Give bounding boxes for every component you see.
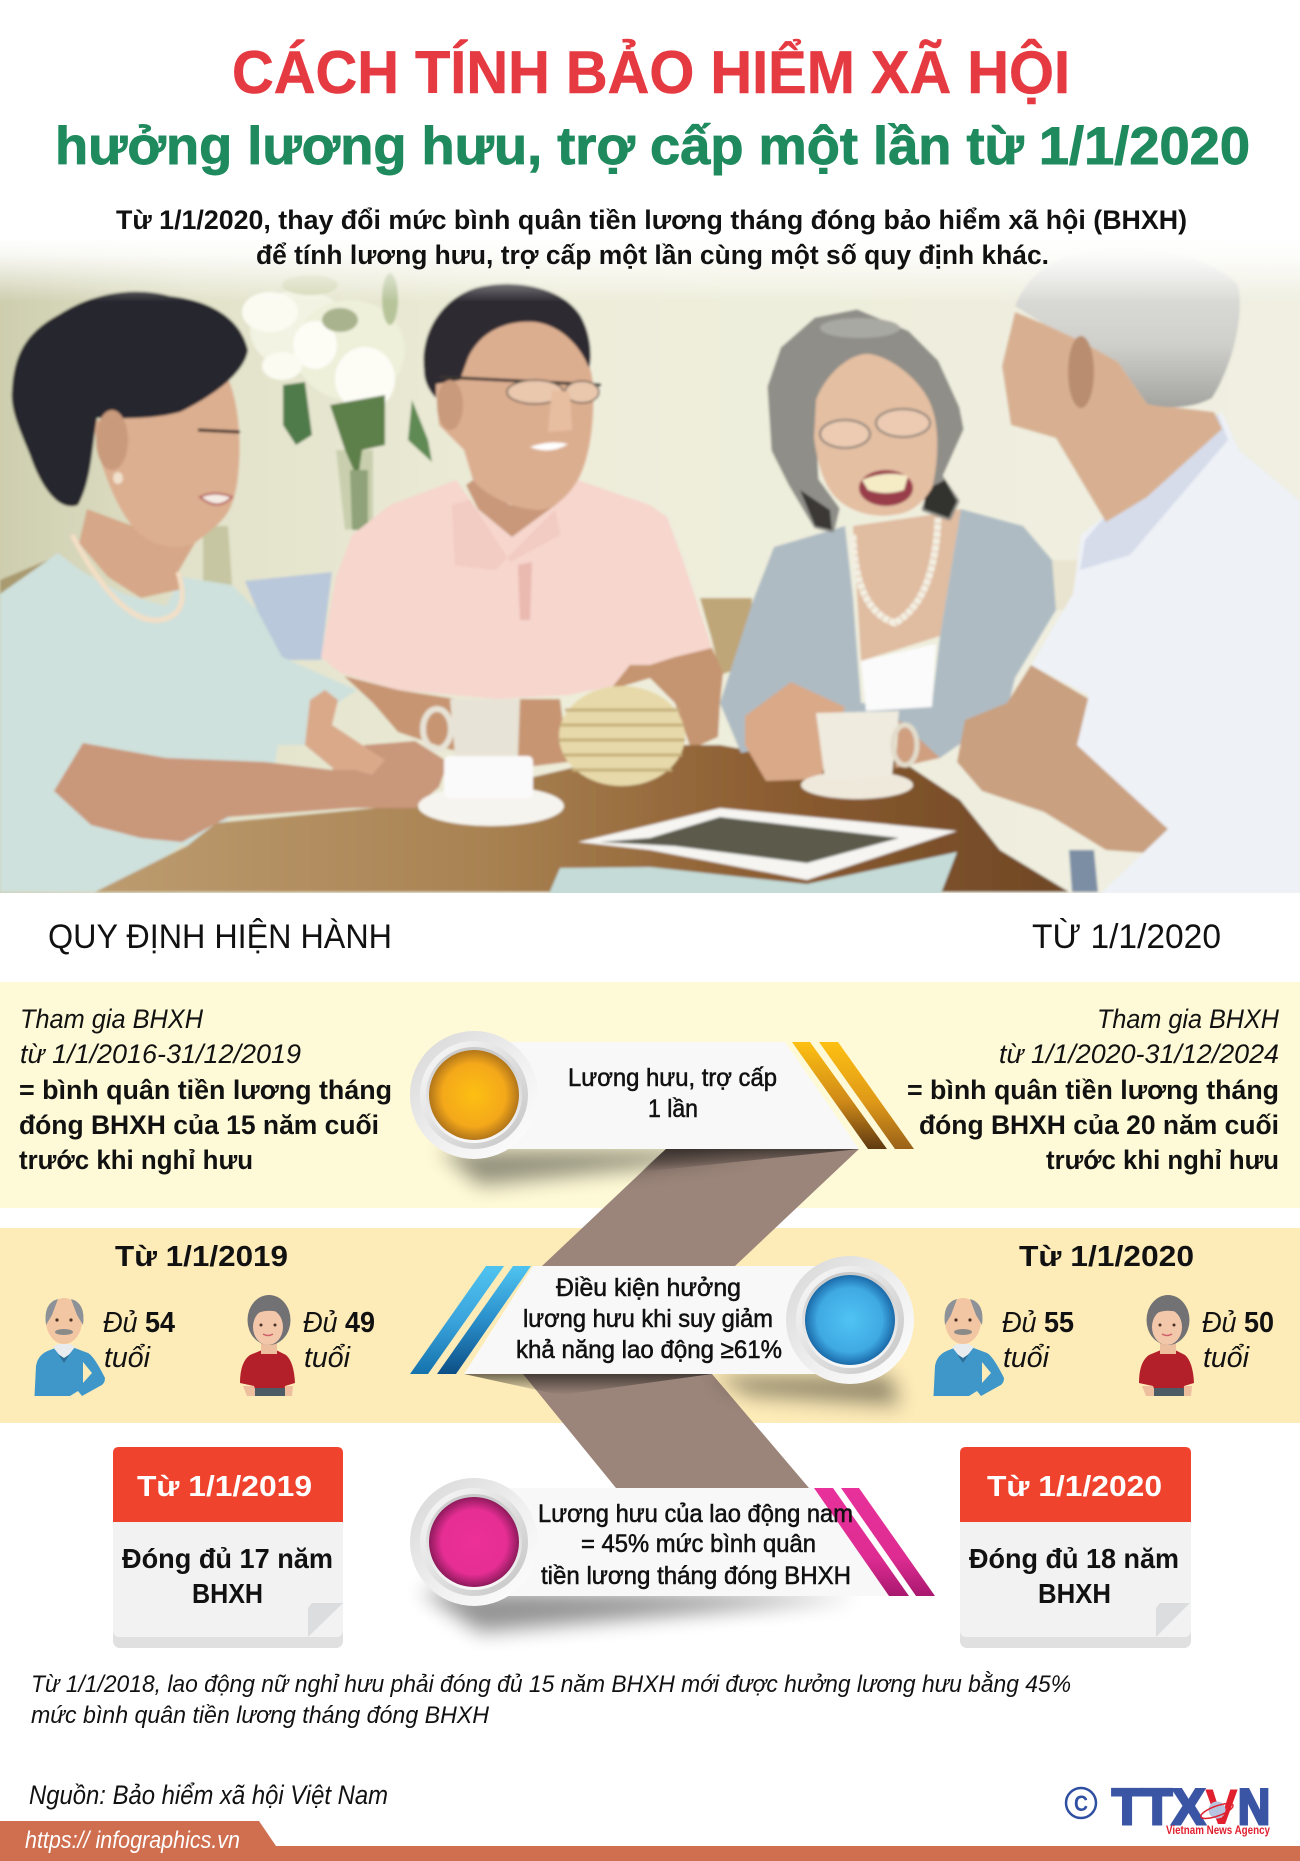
- dial: pink: [410, 1478, 538, 1606]
- ribbon label 3: tiền lương tháng đóng BHXH: [541, 1562, 851, 1590]
- right heading: from 2020: Từ 1/1/2020: [1019, 1241, 1194, 1273]
- card body text: [969, 1543, 1179, 1609]
- cup and saucer: [418, 786, 564, 826]
- title: CÁCH TÍNH BẢO HIỂM XÃ HỘI: [232, 39, 1070, 106]
- intro text: [116, 205, 1187, 270]
- flowers: [336, 450, 373, 530]
- icon: old man right: [934, 1298, 1004, 1396]
- footnote: mức bình quân tiền lương tháng đóng BHXH: [31, 1702, 490, 1729]
- source: Nguồn: Bảo hiểm xã hội Việt Nam: [29, 1780, 388, 1810]
- connector: lower: [464, 1374, 809, 1488]
- icon: old woman left: [240, 1295, 295, 1396]
- card heading: Từ 1/1/2019: [137, 1471, 312, 1503]
- woman 1 face and hair: [93, 379, 240, 547]
- footnote: Từ 1/1/2018, lao động nữ nghỉ hưu phải đóng đủ 15 năm BHXH mới được hưởng lương hưu bằng 45%: [31, 1671, 1071, 1698]
- ribbon label 1: 1 lần: [648, 1095, 698, 1123]
- stripes: pink: [814, 1488, 935, 1596]
- ribbon label 3: = 45% mức bình quân: [581, 1530, 816, 1558]
- man 1 shirt: [321, 478, 712, 699]
- table: [95, 745, 1069, 892]
- icon: old woman right: [1139, 1295, 1194, 1396]
- left text block: current average salary rule: từ 1/1/2016-31/12/2019: [20, 1039, 301, 1069]
- left text block: current average salary rule: Tham gia BHXH: [20, 1004, 203, 1034]
- copyright mark: [1066, 1788, 1096, 1818]
- left text block: current average salary rule: đóng BHXH của 15 năm cuối: [19, 1110, 379, 1140]
- ribbon 2: eligibility: [410, 1256, 914, 1405]
- icon: old man left: [34, 1298, 105, 1396]
- woman 1 body: [0, 553, 357, 892]
- footnote: [31, 1671, 1071, 1729]
- card: 2019 contribution: [113, 1447, 343, 1648]
- card body text: BHXH: [192, 1578, 263, 1609]
- woman 1 arm: [54, 741, 448, 842]
- man 1 face and hair: [435, 312, 593, 510]
- label: man 54: tuổi: [104, 1342, 152, 1374]
- column heading: from 2020: TỪ 1/1/2020: [1032, 918, 1221, 956]
- footer bar with URL: https:// infographics.vn: [25, 1827, 240, 1854]
- ribbon label 3: Lương hưu của lao động nam: [538, 1500, 853, 1528]
- right text block: 2020 average salary rule: Tham gia BHXH: [1097, 1004, 1279, 1034]
- dial: orange: [410, 1031, 538, 1159]
- left text block: current average salary rule: trước khi nghỉ hưu: [19, 1145, 253, 1175]
- label: woman 50: Đủ 50: [1202, 1307, 1274, 1339]
- label: woman 49: tuổi: [304, 1342, 352, 1374]
- photo: four seniors at a table: [0, 236, 1300, 903]
- logo: TTXVN: N: [1238, 1779, 1270, 1835]
- copyright mark: C: [1074, 1791, 1088, 1816]
- ribbon label 2: [516, 1274, 782, 1364]
- ribbon label 2: lương hưu khi suy giảm: [523, 1305, 773, 1333]
- label: man 55: tuổi: [1003, 1342, 1051, 1374]
- logo: TTXVN: [1066, 1779, 1271, 1837]
- woman 2: [853, 509, 961, 661]
- column heading: current rule: QUY ĐỊNH HIỆN HÀNH: [48, 918, 392, 956]
- left text block: current average salary rule: [19, 1004, 392, 1175]
- intro text: Từ 1/1/2020, thay đổi mức bình quân tiền lương tháng đóng bảo hiểm xã hội (BHXH): [116, 205, 1187, 235]
- intro text: để tính lương hưu, trợ cấp một lần cùng một số quy định khác.: [256, 240, 1049, 270]
- man 1 arms: [344, 676, 568, 766]
- right text block: 2020 average salary rule: trước khi nghỉ hưu: [1046, 1145, 1279, 1175]
- connector: upper: [542, 1149, 859, 1266]
- ribbon 1: pension: [410, 1031, 914, 1185]
- ribbon label 1: Lương hưu, trợ cấp: [568, 1064, 777, 1092]
- right text block: 2020 average salary rule: = bình quân tiền lương tháng: [907, 1075, 1279, 1105]
- right text block: 2020 average salary rule: từ 1/1/2020-31/12/2024: [999, 1039, 1279, 1069]
- card body text: Đóng đủ 17 năm: [122, 1543, 333, 1574]
- card: 2020 contribution: [960, 1447, 1191, 1648]
- label: woman 49: [303, 1307, 375, 1374]
- label: man 55: Đủ 55: [1002, 1307, 1074, 1339]
- band: pension and lump sum: [0, 982, 1300, 1208]
- label: man 54: Đủ 54: [103, 1307, 175, 1339]
- left heading: from 2019: Từ 1/1/2019: [115, 1241, 288, 1273]
- label: man 54: [103, 1307, 175, 1374]
- band: reduced capacity: [0, 1228, 1300, 1423]
- right text block: 2020 average salary rule: đóng BHXH của 20 năm cuối: [919, 1110, 1279, 1140]
- stripes: blue: [410, 1266, 531, 1374]
- tablet: [578, 808, 957, 880]
- logo: TTXVN: TTX: [1112, 1779, 1205, 1835]
- ribbon label 2: Điều kiện hưởng: [556, 1274, 741, 1302]
- ribbon 3: male pension: [410, 1478, 935, 1632]
- man 2: [957, 665, 1168, 854]
- label: woman 49: Đủ 49: [303, 1307, 375, 1339]
- card body text: [122, 1543, 333, 1609]
- logo: TTXVN: Vietnam News Agency: [1166, 1825, 1271, 1837]
- basket: [559, 686, 685, 786]
- card heading: Từ 1/1/2020: [987, 1471, 1162, 1503]
- footer bar with URL: [0, 1821, 1300, 1861]
- card body text: Đóng đủ 18 năm: [969, 1543, 1179, 1574]
- subtitle: hưởng lương hưu, trợ cấp một lần từ 1/1/2020: [55, 117, 1250, 176]
- dial: blue: [786, 1256, 914, 1384]
- logo: TTXVN: V: [1205, 1779, 1239, 1835]
- right text block: 2020 average salary rule: [907, 1004, 1279, 1175]
- label: woman 50: [1202, 1307, 1274, 1374]
- label: woman 50: tuổi: [1203, 1342, 1251, 1374]
- ribbon label 2: khả năng lao động ≥61%: [516, 1336, 782, 1364]
- ribbon label 3: [538, 1500, 853, 1590]
- card body text: BHXH: [1038, 1578, 1111, 1609]
- left text block: current average salary rule: = bình quân tiền lương tháng: [19, 1075, 392, 1105]
- label: man 55: [1002, 1307, 1074, 1374]
- ribbon label 1: [568, 1064, 777, 1123]
- stripes: gold: [792, 1042, 914, 1149]
